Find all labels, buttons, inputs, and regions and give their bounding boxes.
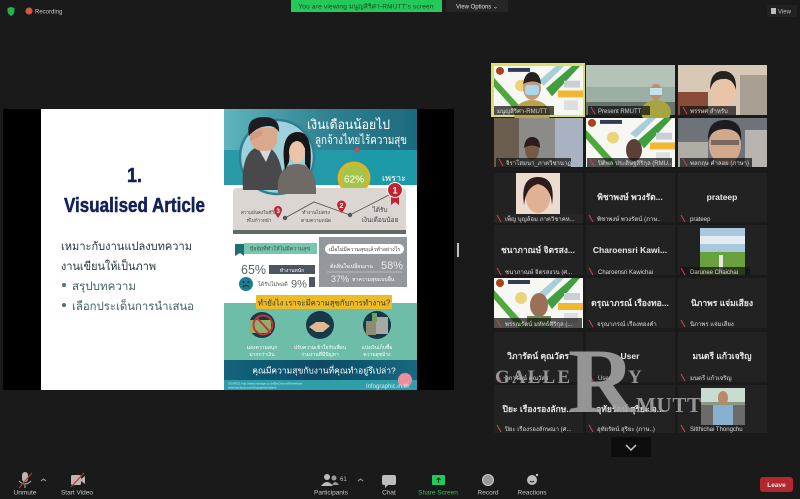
slide body text: งานเขียนให้เป็นภาพ <box>61 258 156 273</box>
rank 2: ตามความถนัด <box>301 218 331 224</box>
participants control: 61 <box>340 477 347 483</box>
poster title: ลูกจ้างไทยไร้ความสุข <box>315 133 407 148</box>
slide heading: 1. <box>127 165 142 187</box>
coping panel: เมื่อไม่มีความสุขแล้วทำอย่างไร <box>329 245 400 253</box>
unmute control: Unmute <box>14 490 37 496</box>
unmute control <box>14 472 46 496</box>
coping panel: 37% <box>331 274 349 284</box>
sources footer: Infographic.in.th <box>366 384 409 390</box>
rank 1 medal: 1 <box>392 186 398 196</box>
icon: security shield <box>8 7 14 16</box>
tile: participant 10: ชนาภาณษ์ จิตรสง... <box>501 245 575 255</box>
tile: Darunee <box>678 225 767 276</box>
top status bar <box>8 0 797 17</box>
view switch: View <box>778 10 792 16</box>
rank 3: ที่ไม่ก้าวหน้า <box>247 217 272 223</box>
sources footer: SOURCE: http://www.manager.co.th/iBizChannel/ViewNews <box>228 382 303 386</box>
tile: participant 20: อุทัยรัตน์ สุริยะ จ... <box>596 404 664 415</box>
tile: participant 15: นิภาพร แจ่มเสียง <box>690 320 734 328</box>
tile: Sitthichai: Sitthichai Thongchu <box>690 427 743 433</box>
view options button: View Options ⌄ <box>456 4 498 10</box>
record control: Record <box>478 490 499 496</box>
reactions control <box>518 474 547 496</box>
rank 2: ทำงานไม่ตรง <box>302 209 330 216</box>
view switch <box>767 5 797 17</box>
advice 2: ร่วมงานที่มีปัญหา <box>301 351 339 358</box>
advice 2: ปรับความเข้าใจกับเพื่อน <box>294 344 347 351</box>
advice 1 <box>247 312 277 358</box>
tile: Charoensri: Charoensri Kawi... <box>593 245 667 255</box>
slide body text: สรุปบทความ <box>72 281 136 293</box>
start video control <box>61 473 93 496</box>
tile: participant 10 <box>494 225 583 276</box>
tile: presenter: มนูญสิริศา-RMUTT <box>497 108 548 115</box>
tile: participant 19: ปิยะ เรืองรองลักษณา (ศ... <box>504 425 572 433</box>
tile: participant 14 <box>586 278 675 328</box>
rank 3 <box>241 206 282 223</box>
62% badge <box>338 148 370 194</box>
tile: Sitthichai <box>678 385 767 433</box>
closing question bar: คุณมีความสุขกับงานที่คุณทำอยู่รึเปล่า? <box>252 364 396 376</box>
couple illustration <box>240 117 316 194</box>
advice 3: แบ่งเงินเก็บซื้อ <box>362 342 392 351</box>
tile: prateep <box>678 173 767 223</box>
tile: participant 14: ดรุณาภรณ์ เรืองทอ... <box>591 298 669 309</box>
tile: participant 3: พรรษศ สำหรับ <box>690 108 728 115</box>
tile: participant 13: พรรณรัตน์ มหัทธ์ศิริกุล (... <box>505 320 573 328</box>
unhappy factors ribbon: ปัจจัยที่ทำให้ไม่มีความสุข <box>250 244 310 252</box>
tile: participant 15 <box>678 278 767 328</box>
infographic poster <box>224 109 417 390</box>
advice 3 <box>362 311 392 358</box>
watermark: Y <box>628 367 642 388</box>
advice 3: ความสุขบ้าง <box>363 351 391 358</box>
tile: participant 7 <box>494 173 583 223</box>
tile: participant 18 <box>678 332 767 382</box>
participants control: Participants <box>314 490 349 496</box>
tile: participant 8: พิชาพงษ์ พวงรัต... <box>597 192 663 202</box>
coping panel: ตัดสินใจเปลี่ยนงาน <box>330 263 373 270</box>
tile: User <box>586 332 675 382</box>
coping panel <box>319 237 407 287</box>
tile: User: User <box>621 351 640 361</box>
watermark: MUTT <box>636 393 701 417</box>
tile: Darunee: Darunee Chaichai <box>690 270 738 276</box>
screen share banner: You are viewing มนูญสิริศา-RMUTT's screen <box>298 2 434 10</box>
tile: participant 19 <box>494 385 583 433</box>
leave button <box>760 477 793 492</box>
tile: participant 10: ชนาภาณษ์ จิตรสงวน (ศ... <box>505 268 573 276</box>
tile: participant 16 <box>494 332 583 382</box>
tile: participant 18: มนตรี แก้วเจริญ <box>690 374 732 382</box>
question banner: ทำยังไง เราจะมีความสุขกับการทำงาน? <box>258 298 391 308</box>
rank 2 <box>301 200 346 224</box>
panel divider handle <box>457 243 459 257</box>
slide body text: เลือกประเด็นการนำเสนอ <box>72 298 194 313</box>
tile: Present RMUTT: Present RMUTT <box>598 109 642 115</box>
unhappy factors stats: ได้รับไม่พอดี <box>257 281 288 288</box>
watermark: R <box>568 330 637 432</box>
rank 2: 2 <box>340 203 344 210</box>
advice 1: มองความสนุก <box>247 345 277 351</box>
because label: เพราะ <box>382 173 406 183</box>
tile: participant 19: ปิยะ เรืองรองลักษ... <box>502 404 573 414</box>
sources footer <box>224 373 417 390</box>
tile: Charoensri <box>586 225 675 276</box>
tile: participant 6 <box>678 118 767 167</box>
share screen control: Share Screen <box>418 490 458 496</box>
advice 1: มากกว่าเงิน <box>249 351 275 358</box>
tile: prateep: prateep <box>707 192 737 202</box>
green advice area <box>224 295 417 361</box>
tile: prateep: prateep <box>690 217 711 223</box>
tile: participant 16: วิภารัตน์ คุณวัตร <box>504 374 549 382</box>
tile: participant 3 <box>678 65 767 115</box>
62% badge: 62% <box>344 174 364 186</box>
advice 2 <box>294 311 347 358</box>
leave button: Leave <box>767 482 786 489</box>
coping panel: 58% <box>381 260 403 272</box>
slide heading: Visualised Article <box>64 195 205 217</box>
slide body text: เหมาะกับงานแปลงบทความ <box>61 241 192 253</box>
question banner <box>256 295 392 309</box>
tile: participant 8: พิชาพงษ์ พวงรัตน์ (ภาษ.. <box>597 215 661 223</box>
tile: participant 18: มนตรี แก้วเจริญ <box>693 351 751 362</box>
reasons ranking panel <box>233 182 406 234</box>
watermark <box>495 330 701 432</box>
chat control: Chat <box>382 490 396 496</box>
unhappy factors stats <box>239 263 315 291</box>
poster title: เงินเดือนน้อยไป <box>307 117 390 132</box>
recording indicator: Recording <box>35 10 62 16</box>
tile: participant 4: จิราโสมนา_ภาควิชานาฏ <box>506 159 571 167</box>
sources footer: www.facebook.com/infographicthailand <box>228 386 277 390</box>
tile: participant 5: ปิติพล ประดิษฐสิริกุล (RMU.. <box>597 160 672 167</box>
chat control <box>382 475 396 496</box>
unhappy factors ribbon <box>235 243 317 256</box>
tile: Charoensri: Charoensri Kawichai <box>598 270 653 276</box>
tile: participant 16: วิภารัตน์ คุณวัตร <box>507 351 569 362</box>
participants control <box>314 474 363 496</box>
page down button <box>611 437 651 457</box>
tile: participant 6: พลกฤษ คำลอย (ภาษา) <box>690 160 749 167</box>
unhappy factors stats: 9% <box>291 278 307 290</box>
tile: participant 20 <box>586 385 675 433</box>
closing question bar <box>224 360 417 380</box>
rank 1 medal: ได้รับ <box>371 206 388 214</box>
tile: participant 4 <box>494 118 583 167</box>
tile: participant 8 <box>586 173 675 223</box>
screen share banner <box>291 0 442 12</box>
poster title <box>307 117 407 148</box>
tile: participant 14: จรุณาภรณ์ เรืองทองคำ <box>597 320 657 328</box>
tile: User: User <box>598 376 611 382</box>
recording indicator <box>26 8 62 16</box>
tile: presenter <box>491 63 585 128</box>
rank 3: 3 <box>276 208 280 215</box>
coping panel: หาความสุขแบบอื่น <box>352 276 395 283</box>
tile: participant 13 <box>494 278 583 328</box>
tile: participant 7: เพ็ญ บุญล้อม ภาควิชาคห... <box>505 214 575 223</box>
reactions control: Reactions <box>518 490 547 496</box>
unhappy factors stats: ทำงานหนัก <box>280 268 304 274</box>
view options button <box>446 0 508 12</box>
tile: participant 15: นิภาพร แจ่มเสียง <box>691 298 753 308</box>
tile: participant 20: อุทัยรัตน์ สุริยะ (ภาษ..) <box>597 425 655 433</box>
rank 1 medal <box>362 182 402 224</box>
rank 3: ความมั่นคงในชีวิต <box>241 209 277 215</box>
unhappy factors stats: 65% <box>241 263 266 277</box>
slide heading <box>64 165 205 217</box>
tile: participant 5 <box>586 118 675 167</box>
panel: participant gallery <box>491 63 767 433</box>
watermark: GALLE <box>495 367 570 388</box>
bottom toolbar <box>14 472 793 496</box>
record control <box>478 474 499 496</box>
slide body text <box>61 241 194 313</box>
tile: Present RMUTT <box>586 65 675 124</box>
panel: shared slide <box>3 109 454 390</box>
share screen control <box>418 475 458 496</box>
rank 1 medal: เงินเดือนน้อย <box>362 216 399 224</box>
start video control: Start Video <box>61 490 93 496</box>
